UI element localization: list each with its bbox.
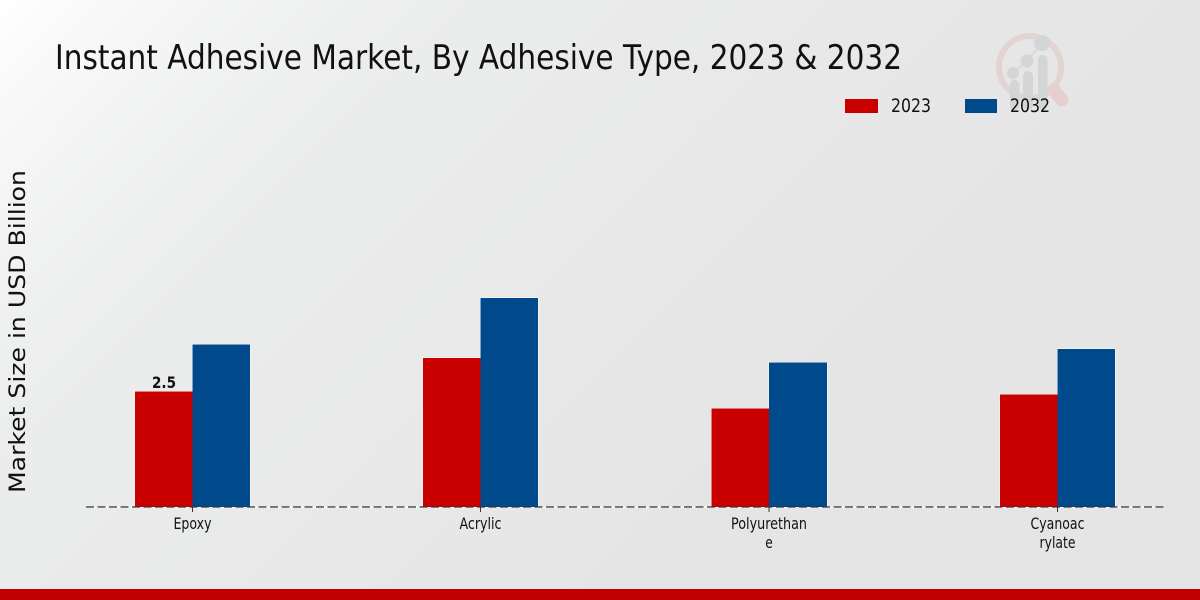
x axis labels: rylate [1040,533,1076,552]
legend: 2023 [845,95,931,117]
legend: 2023: 2023 [891,95,931,117]
x axis labels: Polyurethan [731,514,807,533]
bar group: Acrylic [423,298,538,507]
x axis labels: Epoxy [174,514,212,533]
bar group: Epoxy [135,344,250,507]
x axis labels: Acrylic [460,514,502,533]
x axis labels [174,514,1084,552]
x axis labels: e [765,533,773,552]
watermark logo icon [999,35,1062,110]
y axis title: Market Size in USD Billion [6,170,31,493]
x axis baseline underlay [86,506,1164,508]
legend: 2032: 2032 [1010,95,1050,117]
legend [845,95,1050,117]
bar group: Cyanoacrylate [1000,349,1115,507]
value label: 2.5 [152,373,176,392]
title: Instant Adhesive Market, By Adhesive Type, 2023 & 2032 [55,38,902,78]
bar group: Polyurethane [712,362,827,507]
bottom red bar [0,589,1200,600]
x axis baseline [86,507,1164,512]
legend: 2032 [965,95,1050,117]
x axis labels: Cyanoac [1030,514,1084,533]
